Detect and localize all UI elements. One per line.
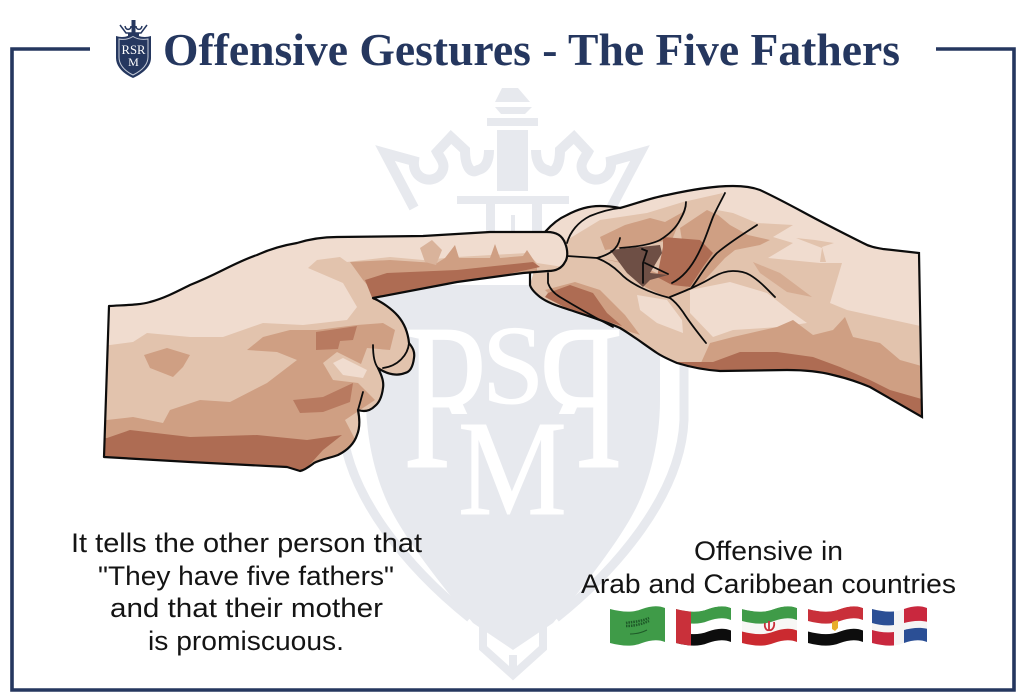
text block: where it is offensive: [581, 536, 956, 599]
text block: meaning of the gesture: is promiscuous.: [148, 626, 344, 656]
watermark: shield fill: [366, 285, 660, 650]
flag: Iran: [742, 606, 797, 646]
logo: RSM crest: M: [128, 55, 139, 69]
logo: RSM crest: [116, 20, 151, 78]
illustration: left hand, pointing index finger: [100, 228, 570, 480]
right hand: outline: [530, 186, 922, 417]
watermark: RSM crest: [342, 88, 684, 675]
flags row: [610, 606, 927, 646]
text block: where it is offensive: Offensive in: [694, 536, 843, 566]
text block: meaning of the gesture: It tells the other person that: [71, 528, 423, 558]
watermark: sword: [457, 88, 569, 234]
watermark: monogram letters: M: [458, 393, 567, 543]
flag: United Arab Emirates: [676, 606, 731, 646]
text block: meaning of the gesture: and that their mother: [110, 593, 383, 623]
text block: meaning of the gesture: "They have five fathers": [98, 561, 394, 591]
text block: where it is offensive: Arab and Caribbean countries: [581, 569, 956, 599]
watermark: crown: [385, 137, 640, 208]
flag: Saudi Arabia: [610, 606, 665, 646]
text block: meaning of the gesture: [71, 528, 423, 656]
left hand: knuckle creases: [358, 343, 409, 410]
illustration: right hand, bunched fingers: [520, 180, 930, 425]
watermark: monogram letters: R: [403, 281, 498, 513]
watermark: shield chevron: [483, 625, 543, 675]
right hand: finger and palm creases: [548, 193, 775, 343]
left hand: outline: [104, 232, 567, 471]
flag: Dominican Republic: [872, 606, 927, 646]
watermark: monogram letters: [403, 281, 623, 543]
logo: RSM crest: RSR: [122, 42, 146, 57]
watermark: monogram letters: R: [528, 281, 623, 513]
flag: Egypt: [808, 606, 863, 646]
watermark: shield outer band: [342, 360, 684, 618]
watermark: monogram letters: S: [482, 304, 544, 428]
title: Offensive Gestures - The Five Fathers: [163, 24, 900, 75]
